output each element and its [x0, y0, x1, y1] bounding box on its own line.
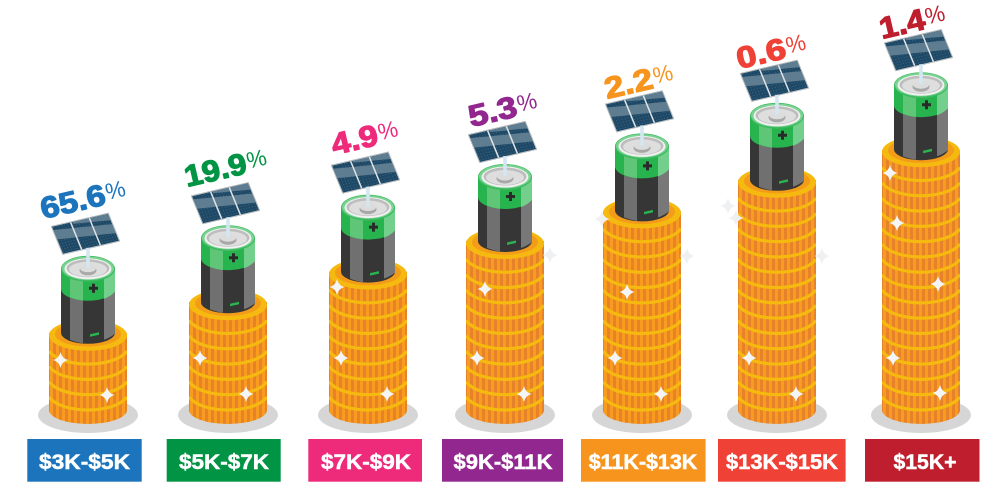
value: 5.3% — [465, 86, 541, 134]
label: $3K-$5K: $3K-$5K — [39, 451, 130, 474]
value: 1.4% — [876, 0, 949, 46]
label: $9K-$11K: $9K-$11K — [454, 451, 552, 474]
label: $5K-$7K — [167, 439, 281, 482]
value: 0.6%: % — [783, 29, 808, 59]
value: 19.9%: 19.9 — [181, 147, 250, 194]
column 4: coin stack and battery — [455, 121, 555, 433]
faint background sparkles — [542, 198, 830, 264]
label: $11K-$13K — [581, 439, 706, 482]
value: 5.3%: % — [514, 87, 539, 117]
value: 19.9%: % — [244, 144, 269, 174]
value: 19.9% — [181, 143, 270, 194]
value: 2.2% — [601, 58, 677, 106]
label: $13K-$15K — [718, 439, 846, 482]
value: 4.9%: 4.9 — [328, 119, 381, 162]
column 6: coin stack and battery — [727, 60, 827, 433]
value: 0.6% — [733, 28, 810, 76]
label: $3K-$5K — [27, 439, 142, 482]
column 5: coin stack and battery — [592, 91, 692, 433]
column 1: coin stack and battery — [38, 213, 138, 433]
label: $15K+: $15K+ — [894, 451, 956, 474]
label: $5K-$7K: $5K-$7K — [179, 451, 269, 474]
column 7: coin stack and battery — [871, 29, 971, 433]
value: 65.6% — [37, 174, 129, 226]
column 3: coin stack and battery — [318, 152, 418, 433]
value: 4.9%: % — [375, 115, 400, 145]
label: $9K-$11K — [442, 439, 563, 482]
label: $7K-$9K — [308, 439, 422, 482]
label: $13K-$15K: $13K-$15K — [726, 451, 838, 474]
value: 1.4%: 1.4 — [876, 3, 929, 46]
value: 1.4%: % — [922, 0, 948, 29]
value: 0.6%: 0.6 — [733, 32, 789, 76]
label: $7K-$9K: $7K-$9K — [321, 451, 411, 474]
column 2: coin stack and battery — [178, 182, 278, 433]
value: 2.2%: % — [650, 59, 675, 89]
value: 4.9% — [328, 114, 402, 162]
value: 65.6%: % — [103, 175, 128, 205]
label: $15K+ — [865, 439, 980, 482]
value: 2.2%: 2.2 — [601, 63, 656, 106]
sparkles on coins — [53, 165, 948, 403]
value: 5.3%: 5.3 — [465, 91, 520, 134]
label: $11K-$13K: $11K-$13K — [589, 451, 697, 474]
value: 65.6%: 65.6 — [37, 179, 109, 226]
